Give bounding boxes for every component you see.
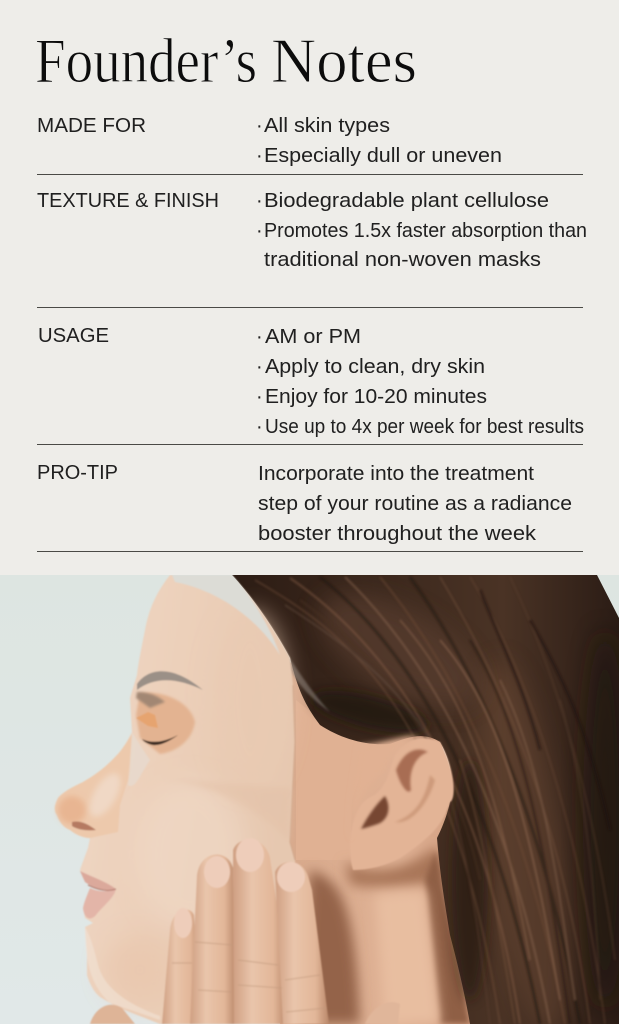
row: pro-tip: [37, 462, 572, 545]
row: texture and finish: ·: [256, 220, 263, 242]
forehead band of mask: [172, 575, 280, 655]
eyebrow: [137, 671, 203, 690]
mask chin edge: [85, 927, 160, 1020]
row: made for: ·: [256, 145, 263, 167]
ear: [350, 736, 454, 870]
eye lashes: [142, 735, 178, 745]
hair: [232, 570, 619, 1024]
row: usage: ·: [256, 326, 263, 348]
grey sheen at hairline: [289, 657, 328, 711]
eye socket: [136, 692, 195, 754]
top panel background: [0, 0, 619, 575]
row: usage: Use up to 4x per week for best results: [265, 416, 584, 438]
row: made for: Especially dull or uneven: [264, 145, 502, 167]
row: made for: All skin types: [264, 115, 390, 137]
row: pro-tip: PRO-TIP: [37, 462, 118, 484]
title: Founder’s: [35, 26, 257, 96]
row: usage: Enjoy for 10-20 minutes: [265, 386, 487, 408]
skin under mask, warm tone: [252, 596, 305, 700]
photo: woman in profile wearing sheet mask: [0, 570, 619, 1024]
ear inner folds: [396, 749, 428, 792]
pinky finger: [162, 910, 196, 1024]
index finger: [275, 862, 329, 1024]
fingernails: [174, 908, 192, 938]
face with sheet mask: [55, 575, 454, 1024]
mask right edge: [290, 685, 295, 860]
row: usage: [38, 325, 584, 438]
row: pro-tip: booster throughout the week: [258, 523, 537, 545]
row: usage: Apply to clean, dry skin: [265, 356, 485, 378]
row: texture and finish: Promotes 1.5x faster absorption than: [264, 220, 587, 242]
under-eye film: [128, 732, 150, 786]
row: texture and finish: traditional non-woven masks: [264, 249, 541, 271]
photo background: [0, 575, 619, 1024]
row: made for: MADE FOR: [37, 115, 146, 137]
hand fingers: [90, 838, 400, 1024]
knuckle creases: [172, 942, 326, 1012]
row: usage: ·: [256, 356, 263, 378]
row: texture and finish: [37, 190, 587, 271]
title: Notes: [271, 26, 417, 96]
hair light patches: [478, 670, 576, 1024]
middle finger: [233, 840, 287, 1024]
row: usage: USAGE: [38, 325, 109, 347]
neck and cheek skin: [280, 660, 480, 1024]
row: pro-tip: step of your routine as a radiance: [258, 493, 572, 515]
row: made for: ·: [256, 115, 263, 137]
ring finger: [190, 854, 236, 1024]
row: usage: AM or PM: [265, 326, 361, 348]
panel: notes table: [37, 115, 587, 552]
title: [35, 26, 417, 96]
mask fold band: [208, 785, 221, 790]
cheek glow: [152, 794, 238, 913]
second hand finger: [366, 1010, 398, 1024]
row: pro-tip: Incorporate into the treatment: [258, 463, 534, 485]
nose uncovered skin: [55, 734, 132, 838]
row: usage: ·: [256, 386, 263, 408]
row: made for: [37, 115, 502, 167]
row: texture and finish: ·: [256, 190, 263, 212]
lips: [80, 871, 116, 919]
hair strands: [255, 577, 615, 1024]
row: texture and finish: TEXTURE & FINISH: [37, 190, 219, 212]
row: texture and finish: Biodegradable plant cellulose: [264, 190, 549, 212]
thumb: [90, 1005, 135, 1024]
nostril: [72, 821, 96, 830]
row: usage: ·: [256, 416, 263, 438]
